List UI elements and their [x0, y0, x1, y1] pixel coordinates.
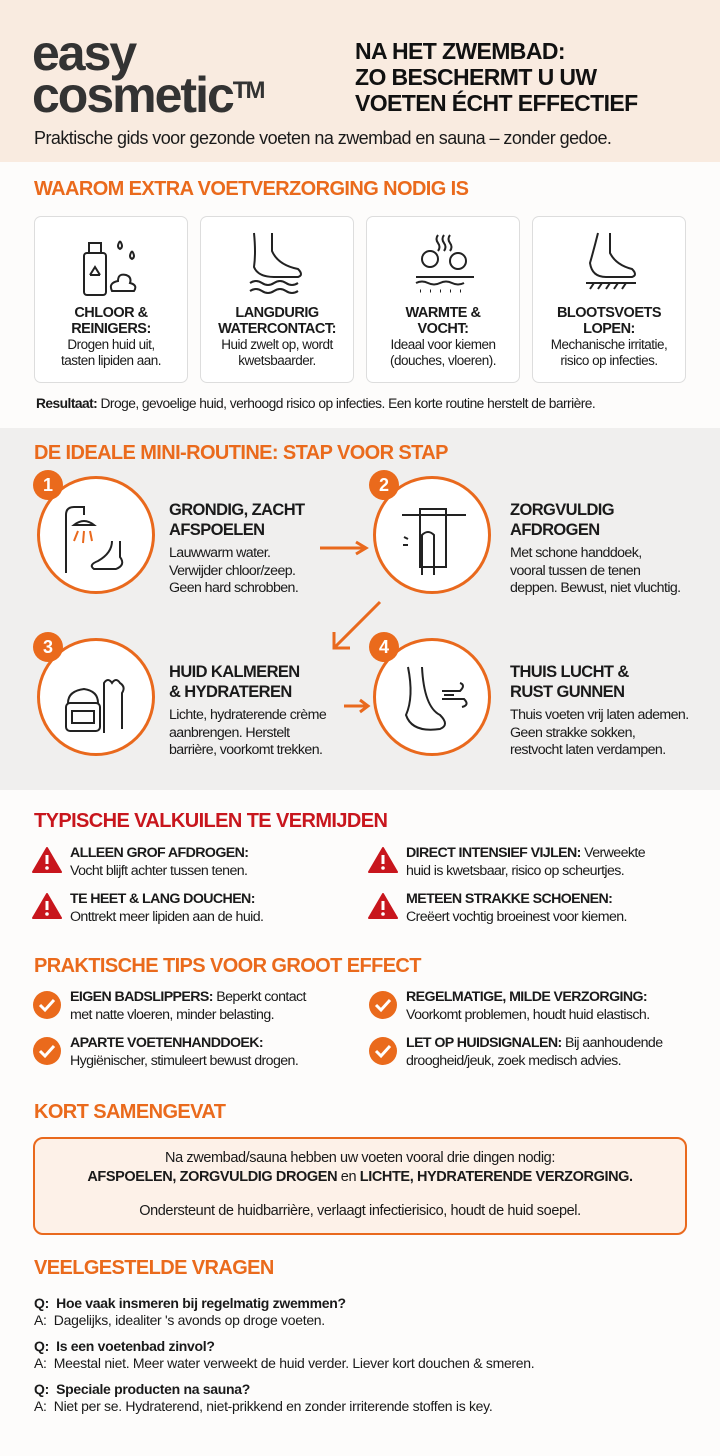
tip 1: met natte vloeren, minder belasting.	[70, 1007, 274, 1023]
tip 2	[33, 1035, 298, 1069]
card: warmte	[366, 216, 520, 383]
card: water: kwetsbaarder.	[238, 353, 316, 368]
tip 1	[33, 989, 306, 1023]
step 3	[33, 632, 326, 758]
step 4: restvocht laten verdampen.	[510, 742, 666, 758]
step 1	[33, 470, 305, 596]
card: chloor: CHLOOR &	[74, 305, 148, 321]
pitfall 3: huid is kwetsbaar, risico op scheurtjes.	[406, 863, 624, 879]
pitfall 3	[368, 845, 645, 879]
heading: summary: KORT SAMENGEVAT	[34, 1101, 225, 1123]
card: blootsvoets: risico op infecties.	[560, 353, 658, 368]
step 4: THUIS LUCHT &	[510, 663, 629, 681]
subtitle: Praktische gids voor gezonde voeten na zwembad en sauna – zonder gedoe.	[34, 128, 611, 148]
icon: germs	[416, 234, 474, 292]
step 1: GRONDIG, ZACHT	[169, 501, 305, 519]
arrow 3->4	[344, 698, 370, 714]
faq 1: Q: Hoe vaak insmeren bij regelmatig zwemmen?	[34, 1295, 346, 1311]
logo: cosmeticTM	[32, 67, 263, 123]
icon: bottle	[83, 240, 136, 296]
pitfall list	[32, 845, 645, 925]
card: warmte: VOCHT:	[418, 321, 468, 337]
summary box: AFSPOELEN, ZORGVULDIG DROGEN en LICHTE, HYDRATERENDE VERZORGING.	[87, 1169, 633, 1185]
icon: foot in water	[250, 232, 302, 294]
step 4: Geen strakke sokken,	[510, 724, 635, 740]
faq 3	[34, 1381, 492, 1414]
circle 4: 4	[379, 637, 389, 657]
heading: routine: DE IDEALE MINI-ROUTINE: STAP VOOR STAP	[34, 442, 448, 464]
title: NA HET ZWEMBAD:	[355, 38, 565, 64]
faq 3: Q: Speciale producten na sauna?	[34, 1381, 250, 1397]
title: VOETEN ÉCHT EFFECTIEF	[355, 90, 638, 116]
tip 1: EIGEN BADSLIPPERS: Beperkt contact	[70, 989, 306, 1005]
step 2: AFDROGEN	[510, 521, 600, 539]
tip 2: APARTE VOETENHANDDOEK:	[70, 1035, 263, 1051]
step 1: Lauwwarm water.	[169, 545, 270, 561]
pitfall 3: DIRECT INTENSIEF VIJLEN: Verweekte	[406, 845, 645, 861]
pitfall 4: METEEN STRAKKE SCHOENEN:	[406, 891, 612, 907]
icon: barefoot	[586, 232, 636, 290]
tip 2: Hygiënischer, stimuleert bewust drogen.	[70, 1053, 298, 1069]
header band	[0, 0, 720, 162]
card: warmte: (douches, vloeren).	[390, 353, 496, 368]
heading: why: WAAROM EXTRA VOETVERZORGING NODIG IS	[34, 178, 468, 200]
circle 3: 3	[43, 637, 53, 657]
card: blootsvoets: LOPEN:	[583, 321, 635, 337]
faq 2: Q: Is een voetenbad zinvol?	[34, 1338, 215, 1354]
tip 4	[369, 1035, 662, 1069]
circle 4	[373, 638, 491, 756]
card: chloor: REINIGERS:	[71, 321, 151, 337]
heading: tips: PRAKTISCHE TIPS VOOR GROOT EFFECT	[34, 955, 421, 977]
step 4: RUST GUNNEN	[510, 683, 624, 701]
step 3: Lichte, hydraterende crème	[169, 707, 326, 723]
card: water: Huid zwelt op, wordt	[221, 337, 333, 352]
card: chloor: tasten lipiden aan.	[61, 353, 161, 368]
step 3: aanbrengen. Herstelt	[169, 724, 290, 740]
pitfall 4	[368, 891, 627, 925]
pitfall 2: Onttrekt meer lipiden aan de huid.	[70, 909, 263, 925]
card: water: WATERCONTACT:	[218, 321, 336, 337]
faq 3: A: Niet per se. Hydraterend, niet-prikkend en zonder irriterende stoffen is key.	[34, 1398, 492, 1414]
card: warmte: WARMTE &	[406, 305, 480, 321]
step 3: barrière, voorkomt trekken.	[169, 742, 322, 758]
circle 1: 1	[43, 475, 53, 495]
title: ZO BESCHERMT U UW	[355, 64, 597, 90]
summary box	[33, 1137, 687, 1235]
step 3: & HYDRATEREN	[169, 683, 292, 701]
step 1: Verwijder chloor/zeep.	[169, 562, 295, 578]
card: blootsvoets	[532, 216, 686, 383]
card: water	[200, 216, 354, 383]
summary box: Na zwembad/sauna hebben uw voeten vooral drie dingen nodig:	[165, 1150, 555, 1166]
circle 2	[373, 476, 491, 594]
summary box: Ondersteunt de huidbarrière, verlaagt infectierisico, houdt de huid soepel.	[139, 1203, 581, 1219]
circle 3	[37, 638, 155, 756]
pitfall 2: TE HEET & LANG DOUCHEN:	[70, 891, 255, 907]
pitfall 4: Creëert vochtig broeinest voor kiemen.	[406, 909, 627, 925]
card: water: LANGDURIG	[235, 305, 319, 321]
title	[355, 38, 638, 116]
circle 1	[37, 476, 155, 594]
pitfall 1	[32, 845, 248, 879]
card: warmte: Ideaal voor kiemen	[390, 337, 496, 352]
heading: faq: VEELGESTELDE VRAGEN	[34, 1257, 274, 1279]
pitfall 2	[32, 891, 263, 925]
logo	[32, 25, 264, 123]
arrow 1->2	[320, 540, 369, 556]
step 1: Geen hard schrobben.	[169, 580, 298, 596]
pitfall 1: Vocht blijft achter tussen tenen.	[70, 863, 247, 879]
tips list	[33, 989, 662, 1069]
step 2: deppen. Bewust, niet vluchtig.	[510, 580, 680, 596]
faq 2	[34, 1338, 534, 1371]
step 2: vooral tussen de tenen	[510, 562, 640, 578]
card: chloor	[34, 216, 188, 383]
tip 3	[369, 989, 650, 1023]
tip 3: Voorkomt problemen, houdt huid elastisch.	[406, 1007, 650, 1023]
panel: routine	[0, 428, 720, 790]
arrow 2->3	[332, 601, 381, 650]
card: blootsvoets: BLOOTSVOETS	[557, 305, 661, 321]
card: chloor: Drogen huid uit,	[67, 337, 155, 352]
logo: easy	[32, 25, 135, 81]
step 4	[369, 632, 689, 758]
faq 1	[34, 1295, 346, 1328]
result text: Resultaat: Droge, gevoelige huid, verhoogd risico op infecties. Een korte routine herstelt de barrière.	[36, 396, 595, 411]
heading: pitfalls: TYPISCHE VALKUILEN TE VERMIJDEN	[34, 810, 387, 832]
circle 2: 2	[379, 475, 389, 495]
faq 2: A: Meestal niet. Meer water verweekt de huid verder. Liever kort douchen & smeren.	[34, 1355, 534, 1371]
step 2: ZORGVULDIG	[510, 501, 614, 519]
step 1: AFSPOELEN	[169, 521, 264, 539]
step 2	[369, 470, 680, 596]
step 4: Thuis voeten vrij laten ademen.	[510, 707, 689, 723]
step 3: HUID KALMEREN	[169, 663, 300, 681]
step 2: Met schone handdoek,	[510, 545, 642, 561]
tip 3: REGELMATIGE, MILDE VERZORGING:	[406, 989, 647, 1005]
faq 1: A: Dagelijks, idealiter 's avonds op droge voeten.	[34, 1312, 325, 1328]
card: blootsvoets: Mechanische irritatie,	[551, 337, 667, 352]
tip 4: LET OP HUIDSIGNALEN: Bij aanhoudende	[406, 1035, 662, 1051]
pitfall 1: ALLEEN GROF AFDROGEN:	[70, 845, 248, 861]
tip 4: droogheid/jeuk, zoek medisch advies.	[406, 1053, 621, 1069]
